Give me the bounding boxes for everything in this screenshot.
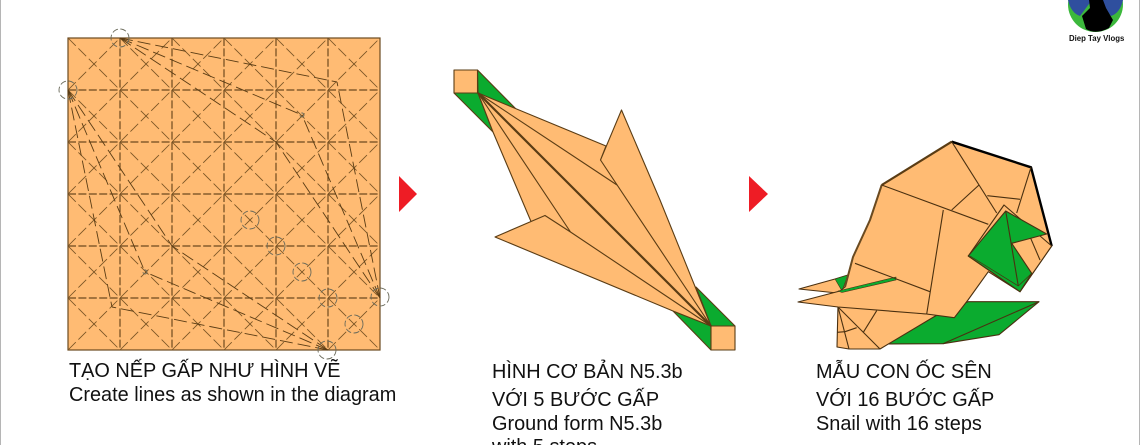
- foot folds: [837, 305, 937, 349]
- paper square: [68, 38, 380, 350]
- caption: ground form: Ground form N5.3b: [492, 413, 662, 435]
- fold lines: [478, 93, 711, 326]
- shell outer edges: [882, 142, 952, 185]
- caption: ground form: [491, 360, 683, 445]
- diagonal creases: [68, 38, 380, 350]
- caption: ground form: VỚI 5 BƯỚC GẤP: [492, 388, 659, 411]
- caption: ground form: HÌNH CƠ BẢN N5.3b: [492, 360, 683, 383]
- green pyramid flap: [968, 205, 1052, 292]
- caption: snail: MẪU CON ỐC SÊN: [816, 359, 992, 383]
- caption: crease pattern: [69, 359, 396, 406]
- panel: crease pattern diagram: [59, 29, 389, 359]
- upper tail wing: [799, 275, 880, 293]
- shell fold lines: [855, 142, 1031, 314]
- caption: snail: Snail with 16 steps: [816, 413, 982, 435]
- caption: crease pattern: Create lines as shown in the diagram: [69, 384, 396, 406]
- green sliver: [838, 277, 896, 292]
- arrow: step one to two: [399, 176, 417, 212]
- folded body: [478, 93, 711, 326]
- panel: snail model: [798, 142, 1052, 349]
- crease grid lines: [68, 38, 380, 350]
- panel: ground form N5.3b: [454, 70, 735, 350]
- caption: snail: [816, 359, 994, 435]
- fan creases: [68, 38, 380, 350]
- logo: Diep Tay Vlogs: [1068, 0, 1125, 43]
- reference circles: [59, 29, 389, 359]
- logo name: Diep Tay Vlogs: [1069, 34, 1125, 43]
- logo badge: [1068, 0, 1123, 32]
- arrow: step two to three: [749, 176, 768, 212]
- caption: crease pattern: TẠO NẾP GẤP NHƯ HÌNH VẼ: [69, 359, 341, 382]
- green leaf: [885, 302, 1039, 344]
- shell body: [798, 142, 1052, 318]
- green flaps: [454, 70, 735, 350]
- small squares: [454, 70, 735, 350]
- green tail tip: [835, 275, 848, 291]
- caption: snail: VỚI 16 BƯỚC GẤP: [816, 388, 994, 411]
